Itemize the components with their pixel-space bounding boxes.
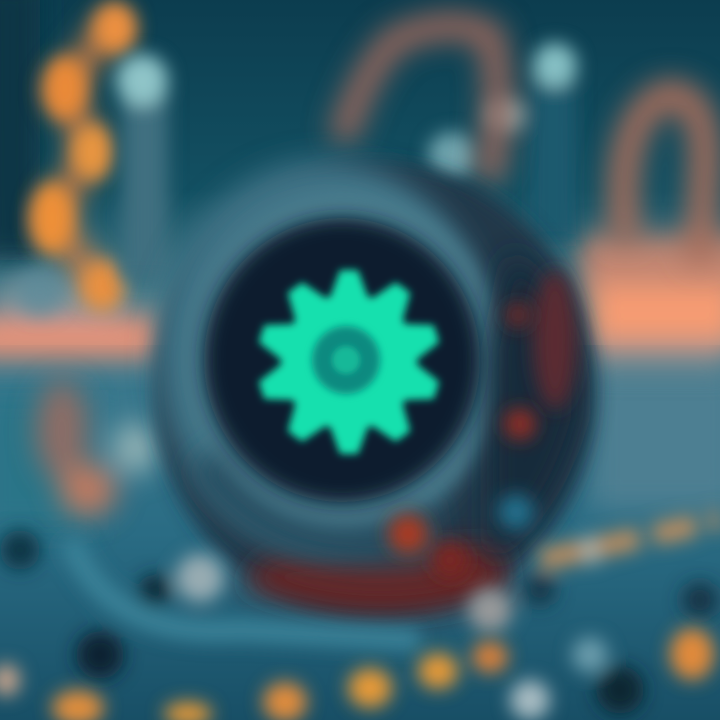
orb dark inner disc (204, 218, 480, 502)
foreground orange beads (0, 628, 714, 720)
towers (16, 43, 577, 316)
red haze column lower left (36, 380, 159, 516)
lower landscape (0, 345, 720, 720)
orange chain left (30, 2, 137, 312)
horizon glow band (0, 235, 720, 367)
orb outer shell (155, 160, 595, 618)
icon: glowing gear (255, 270, 443, 454)
red and blue fragments (388, 302, 536, 578)
arches background (345, 26, 705, 250)
foreground bokeh dots (0, 520, 720, 720)
background sky (0, 0, 720, 345)
